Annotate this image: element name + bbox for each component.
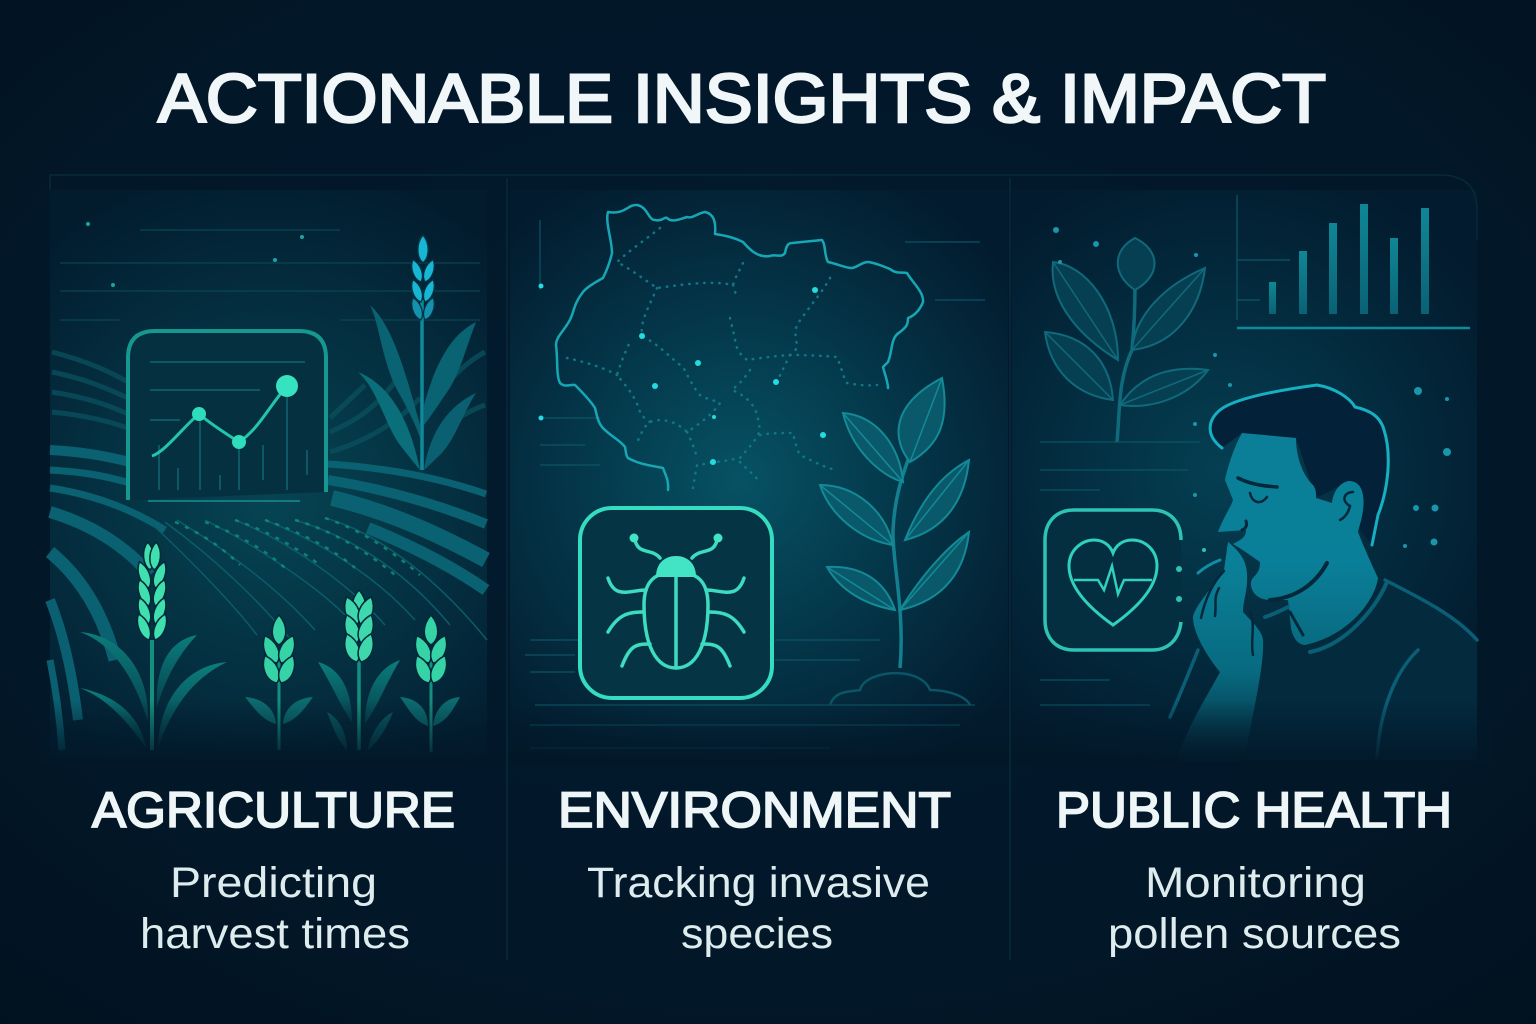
icon: heart with pulse: [1069, 540, 1157, 625]
upper field bands: [52, 352, 485, 452]
title: ACTIONABLE INSIGHTS & IMPACT: [158, 60, 1326, 137]
face and neck: [1218, 433, 1378, 645]
soil mound: [830, 673, 970, 705]
label: public health: pollen sources: [1108, 910, 1401, 958]
map regions: [567, 228, 877, 488]
background lines and dots: [1040, 442, 1200, 705]
icon: potted plant leaves: [1045, 238, 1208, 442]
label: environment: species: [681, 910, 833, 958]
bug icon card: [580, 508, 772, 698]
panel frame dividers: [50, 175, 1477, 960]
torso: [1242, 580, 1477, 760]
map dots: [538, 284, 826, 465]
field bands: [50, 450, 486, 750]
label: agriculture: [92, 782, 455, 958]
icon: green wheat large: [80, 542, 227, 750]
bar chart: [1237, 195, 1470, 328]
panel: agriculture: [50, 190, 487, 760]
background lines: [525, 220, 985, 748]
label: environment: [558, 782, 951, 958]
background dashboard lines: [60, 230, 480, 320]
icon: tall blue wheat: [358, 235, 476, 470]
label: public health: [1056, 782, 1452, 958]
label: public health: Monitoring: [1145, 859, 1366, 907]
chart card: [128, 331, 326, 501]
line chart: [152, 386, 287, 456]
map outline: [556, 205, 923, 490]
label: agriculture: Predicting: [170, 859, 377, 907]
perspective field rows: [153, 518, 487, 645]
label: environment: Tracking invasive: [587, 859, 930, 907]
label: agriculture: AGRICULTURE: [92, 782, 455, 838]
icon: beetle: [608, 540, 744, 668]
icon: green wheat small 2: [318, 590, 400, 750]
ambient dots: [86, 222, 304, 287]
facial details: [1238, 478, 1353, 635]
panel bottom fade: [40, 700, 1490, 766]
label: agriculture: harvest times: [140, 910, 410, 958]
icon: man coughing: [1170, 385, 1477, 762]
icon: green wheat small 1: [245, 615, 313, 750]
green dashes: [175, 518, 420, 575]
heart icon card: [1045, 510, 1206, 650]
hair: [1210, 385, 1388, 545]
collar and clothes: [1170, 580, 1477, 757]
panel: public health: [1012, 190, 1477, 762]
label: public health: PUBLIC HEALTH: [1056, 782, 1452, 838]
label: environment: ENVIRONMENT: [558, 782, 951, 838]
panel: environment: [510, 190, 1008, 760]
icon: leafy plant: [820, 378, 970, 705]
hand: [1177, 542, 1263, 762]
icon: green wheat small 3: [400, 615, 460, 752]
